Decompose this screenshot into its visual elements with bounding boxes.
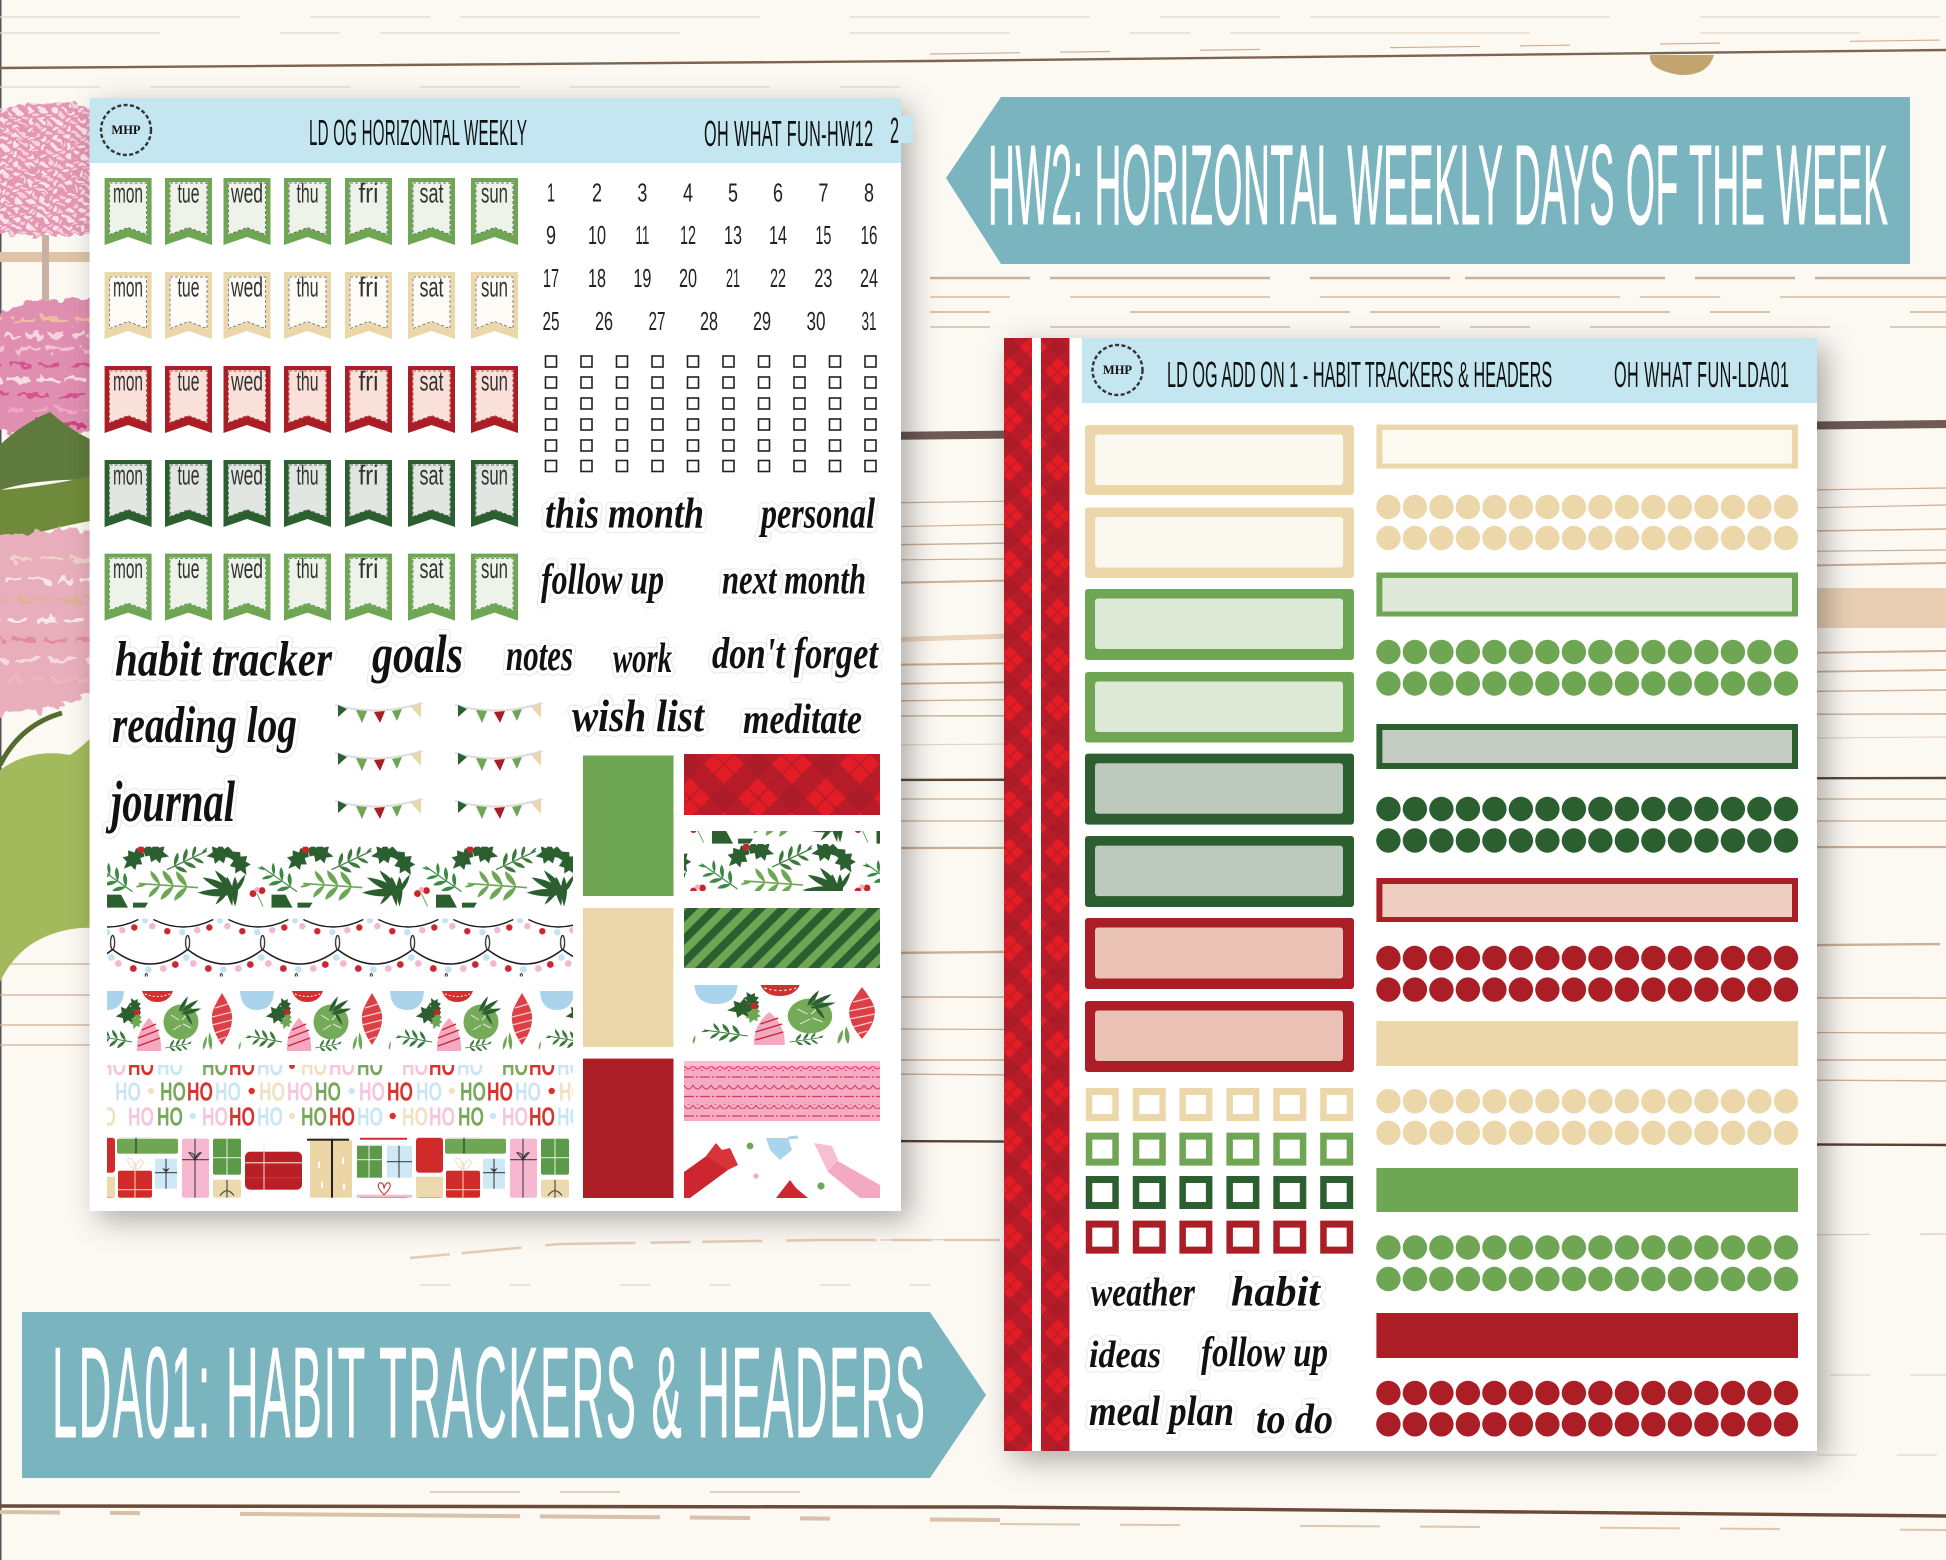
day flags: mon — [113, 366, 143, 396]
day flags: fri — [358, 553, 378, 584]
day flags: thu — [296, 272, 318, 302]
date numbers 1 to 31: 4 — [683, 178, 693, 208]
ho ho ho strip — [107, 1065, 573, 1126]
day flags: sun — [481, 460, 508, 490]
ho ho ho strip: HO — [115, 1077, 141, 1107]
date numbers 1 to 31: 8 — [864, 178, 874, 208]
date numbers 1 to 31: 18 — [588, 263, 606, 293]
day flags: sun — [481, 553, 508, 584]
ho ho ho strip: HO — [529, 1102, 555, 1132]
script word stickers: personal — [758, 490, 875, 538]
ho ho ho strip: HO — [429, 1102, 455, 1132]
ho ho ho strip: HO — [329, 1102, 355, 1132]
date numbers 1 to 31: 15 — [815, 220, 831, 250]
date numbers 1 to 31: 24 — [860, 263, 878, 293]
ho ho ho strip: HO — [416, 1077, 442, 1107]
date numbers 1 to 31: 22 — [770, 263, 786, 293]
date numbers 1 to 31: 16 — [860, 220, 878, 250]
candy strip — [684, 1137, 880, 1198]
stem — [0, 713, 62, 765]
script word stickers: reading log — [112, 697, 297, 754]
ho ho ho strip: HO — [357, 1102, 383, 1132]
day flags: tue — [178, 272, 200, 302]
banner: LDA01 habit trackers: LDA01: HABIT TRACKERS & HEADERS — [52, 1322, 925, 1465]
dot rows — [1376, 495, 1798, 1437]
banner: HW2 horizontal weekly days: HW2: HORIZONTAL WEEKLY DAYS OF THE WEEK — [988, 122, 1888, 248]
script word stickers: next month — [722, 558, 866, 604]
day flags: tue — [178, 460, 200, 490]
date numbers 1 to 31: 12 — [680, 220, 696, 250]
day flags: fri — [358, 178, 378, 208]
date numbers 1 to 31: 17 — [543, 263, 559, 293]
day flags: tue — [178, 553, 200, 584]
script word stickers: habit tracker — [115, 630, 332, 686]
ho ho ho strip: HO — [215, 1077, 241, 1107]
day flags: fri — [358, 366, 378, 396]
ho ho ho strip: HO — [128, 1051, 154, 1081]
patterned washi strips left — [90, 847, 585, 1198]
solid colour blocks — [583, 756, 674, 1198]
ho ho ho strip: HO — [259, 1077, 285, 1107]
panel: LDA01 sticker sheet — [1004, 338, 1817, 1451]
day flags: sat — [420, 272, 444, 302]
date numbers 1 to 31: 10 — [588, 220, 606, 250]
ho ho ho strip: HO — [402, 1051, 428, 1081]
script word stickers: wish list — [572, 690, 705, 741]
sheet header: OH WHAT FUN-HW12 — [704, 114, 873, 154]
script word stickers: this month — [545, 490, 704, 538]
ho ho ho strip: HO — [359, 1077, 385, 1107]
ho ho ho strip: HO — [502, 1051, 528, 1081]
day flags: wed — [230, 553, 263, 584]
day flags: sun — [481, 272, 508, 302]
date numbers 1 to 31: 26 — [595, 306, 613, 336]
date numbers 1 to 31: 25 — [542, 306, 560, 336]
icon: MHP wreath logo — [101, 105, 151, 155]
script word stickers: habit — [1231, 1270, 1321, 1316]
date numbers 1 to 31: 29 — [753, 306, 771, 336]
date numbers 1 to 31: 19 — [633, 263, 651, 293]
day flags: thu — [296, 553, 318, 584]
ho ho ho strip: HO — [187, 1077, 213, 1107]
sheet header — [90, 98, 913, 163]
ho ho ho strip: HO — [157, 1051, 183, 1081]
ho ho ho strip: HO — [100, 1051, 126, 1081]
ho ho ho strip: HO — [315, 1077, 341, 1107]
day flags: mon — [113, 553, 143, 584]
day flags: sat — [420, 366, 444, 396]
icon: MHP wreath logo: MHP — [1103, 363, 1132, 377]
day flags: wed — [230, 178, 263, 208]
date numbers 1 to 31: 13 — [724, 220, 742, 250]
day flags: thu — [296, 460, 318, 490]
leaf: dark green — [0, 412, 92, 490]
flower: top pink — [0, 105, 110, 235]
patterned washi strips right — [684, 754, 880, 1198]
small square checkboxes — [1086, 1088, 1353, 1254]
day flags: fri — [358, 272, 378, 302]
script word stickers: to do — [1256, 1397, 1333, 1443]
sheet header — [1082, 338, 1817, 403]
ho ho ho strip: HO — [128, 1102, 154, 1132]
ho ho ho strip: HO — [529, 1051, 555, 1081]
panel: HW12 sticker sheet — [90, 98, 913, 1211]
day flags: wed — [230, 460, 263, 490]
ho ho ho strip: HO — [229, 1102, 255, 1132]
wood band behind flowers — [0, 252, 95, 262]
icon: MHP wreath logo: MHP — [111, 123, 141, 137]
script word stickers: follow up — [1201, 1330, 1328, 1376]
plaid side strips — [1004, 338, 1070, 1451]
day flags: tue — [178, 366, 200, 396]
script word stickers: weather — [1091, 1270, 1195, 1315]
day flags — [105, 178, 518, 621]
date numbers 1 to 31: 20 — [679, 263, 697, 293]
checkbox grid — [546, 356, 876, 472]
date numbers 1 to 31: 23 — [814, 263, 832, 293]
ho ho ho strip: HO — [257, 1102, 283, 1132]
day flags: sun — [481, 366, 508, 396]
header bars — [1376, 425, 1798, 1358]
ho ho ho strip: HO — [357, 1051, 383, 1081]
ho ho ho strip: HO — [559, 1077, 585, 1107]
ho ho ho strip: HO — [257, 1051, 283, 1081]
script word stickers: don't forget — [712, 629, 879, 678]
day flags: wed — [230, 272, 263, 302]
ho ho ho strip: HO — [202, 1102, 228, 1132]
ho ho ho strip: HO — [301, 1102, 327, 1132]
day flags: sat — [420, 553, 444, 584]
ho ho ho strip: HO — [329, 1051, 355, 1081]
ho ho ho strip: HO — [160, 1077, 186, 1107]
day flags: mon — [113, 272, 143, 302]
script word stickers — [1089, 1270, 1333, 1443]
ho ho ho strip: HO — [387, 1077, 413, 1107]
date numbers 1 to 31: 14 — [769, 220, 787, 250]
date numbers 1 to 31: 6 — [773, 178, 783, 208]
day flags: sat — [420, 178, 444, 208]
ho ho ho strip: HO — [458, 1102, 484, 1132]
date numbers 1 to 31: 3 — [637, 178, 647, 208]
date numbers 1 to 31: 9 — [546, 220, 556, 250]
day flags: mon — [113, 178, 143, 208]
script word stickers: follow up — [541, 557, 664, 604]
icon: MHP wreath logo — [1092, 345, 1142, 395]
date numbers 1 to 31: 1 — [547, 178, 555, 208]
rounded header boxes — [1085, 425, 1354, 1072]
day flags: thu — [296, 366, 318, 396]
script word stickers: meditate — [743, 697, 862, 743]
ho ho ho strip: HO — [487, 1077, 513, 1107]
script word stickers: notes — [506, 631, 573, 680]
ho ho ho strip: HO — [229, 1051, 255, 1081]
script word stickers: meal plan — [1089, 1389, 1234, 1435]
script word stickers: ideas — [1089, 1334, 1161, 1376]
ho ho ho strip: HO — [429, 1051, 455, 1081]
ho ho ho strip: HO — [515, 1077, 541, 1107]
leaf: light green large — [0, 733, 95, 982]
date numbers 1 to 31: 28 — [700, 306, 718, 336]
day flags: fri — [358, 460, 378, 490]
flower: middle pink — [0, 298, 110, 435]
date numbers 1 to 31: 31 — [862, 306, 876, 336]
script word stickers: journal — [105, 769, 236, 834]
ho ho ho strip: HO — [287, 1077, 313, 1107]
script word stickers — [105, 490, 879, 834]
ho ho ho strip: HO — [557, 1051, 583, 1081]
day flags: sun — [481, 178, 508, 208]
pink scallop strip — [684, 1061, 880, 1121]
date numbers 1 to 31: 27 — [648, 306, 666, 336]
ho ho ho strip: HO — [557, 1102, 583, 1132]
ho ho ho strip: HO — [502, 1102, 528, 1132]
leaf: green band — [0, 475, 95, 545]
sheet header: LD OG ADD ON 1 - HABIT TRACKERS & HEADERS — [1167, 355, 1552, 395]
date numbers 1 to 31: 11 — [635, 220, 649, 250]
day flags: tue — [178, 178, 200, 208]
date numbers 1 to 31 — [542, 178, 878, 336]
day flags: thu — [296, 178, 318, 208]
sheet header: 2 — [890, 110, 899, 151]
day flags: sat — [420, 460, 444, 490]
date numbers 1 to 31: 7 — [818, 178, 828, 208]
ho ho ho strip: HO — [202, 1051, 228, 1081]
ho ho ho strip: HO — [460, 1077, 486, 1107]
sheet header: OH WHAT FUN-LDA01 — [1614, 355, 1789, 395]
flowers and leaves at left edge — [0, 105, 110, 982]
ho ho ho strip: HO — [157, 1102, 183, 1132]
ho ho ho strip: HO — [457, 1051, 483, 1081]
sheet header: LD OG HORIZONTAL WEEKLY — [309, 112, 527, 153]
date numbers 1 to 31: 30 — [806, 306, 826, 336]
date numbers 1 to 31: 5 — [728, 178, 738, 208]
ho ho ho strip: HO — [402, 1102, 428, 1132]
script word stickers: work — [613, 636, 672, 682]
ho ho ho strip: HO — [301, 1051, 327, 1081]
bunting flags — [335, 703, 542, 819]
script word stickers: goals — [371, 624, 463, 684]
ho ho ho strip: HO — [90, 1102, 116, 1132]
day flags: wed — [230, 366, 263, 396]
date numbers 1 to 31: 21 — [726, 263, 740, 293]
flower: lower pale pink — [0, 529, 110, 715]
day flags: mon — [113, 460, 143, 490]
date numbers 1 to 31: 2 — [592, 178, 602, 208]
